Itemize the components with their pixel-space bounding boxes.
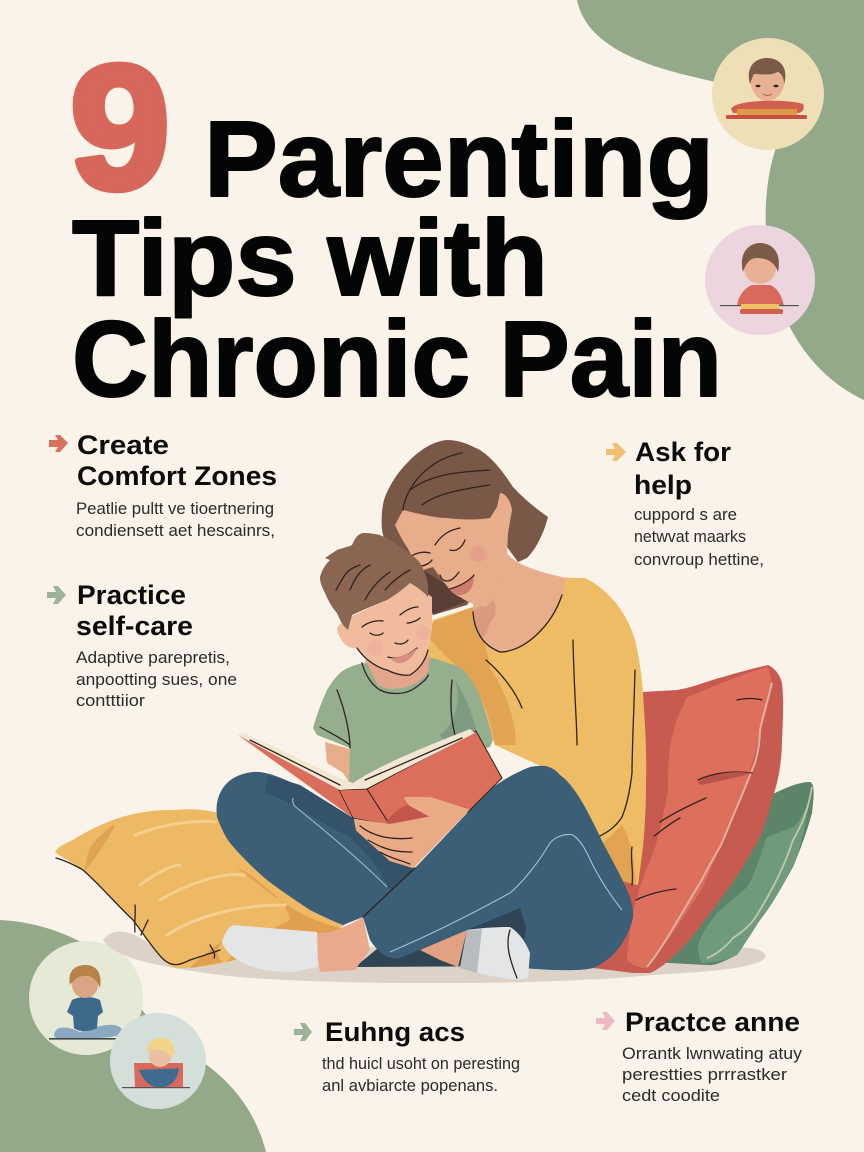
icon: child sitting, pale green circle [29, 941, 143, 1055]
icon: child at table, pink circle [705, 225, 815, 335]
tip: Create Comfort Zones: condiensett aet hescainrs, [76, 522, 275, 540]
background blob: top right [577, 0, 864, 400]
body: Orrantk lwnwating atuy [622, 1045, 803, 1063]
arrow: yellow [606, 443, 626, 461]
pages [238, 729, 475, 790]
arrow: coral [49, 435, 68, 452]
arrow: sage [294, 1023, 312, 1041]
woman [382, 440, 646, 885]
background blob: bottom left [0, 920, 266, 1152]
head [350, 583, 432, 675]
arrow: sage [47, 586, 66, 604]
heading: Create [77, 430, 169, 460]
title line: Chronic Pain: Chronic Pain [72, 298, 722, 419]
right cover [367, 731, 502, 825]
shirt [313, 658, 493, 790]
floor shadow [103, 932, 766, 983]
body: thd huicl usoht on peresting [322, 1055, 520, 1073]
tip: Create Comfort Zones [49, 430, 277, 540]
body: cuppord s are [634, 506, 737, 524]
pillow: red [593, 665, 783, 973]
heading: Euhng acs [325, 1017, 465, 1047]
pillow: green [650, 782, 814, 965]
child hair [320, 533, 428, 630]
collar [362, 663, 428, 694]
sweater [425, 577, 646, 885]
ankle [315, 917, 370, 972]
socks [222, 925, 530, 980]
facial features [410, 528, 465, 581]
book [238, 729, 502, 825]
title numeral 9: 9 [70, 30, 170, 226]
hair strands [403, 453, 490, 510]
hair shadow lower [405, 560, 470, 615]
heading: Practce anne [625, 1007, 800, 1037]
tip: Practice self-care [47, 580, 237, 710]
near leg left knee [217, 772, 415, 925]
pillow: yellow [55, 809, 345, 968]
title [70, 30, 722, 419]
tip: Euhng acs: anl avbiarcte popenans. [322, 1077, 498, 1095]
title line: Tips with: Tips with [72, 197, 548, 318]
tip: Practce anne: cedt coodite [622, 1087, 720, 1105]
child features [362, 607, 420, 658]
tip: Practice self-care: self-care [76, 611, 193, 641]
ear [337, 621, 357, 648]
tip: Practice self-care: anpootting sues, one [76, 671, 237, 689]
tip: Ask for help: help [634, 470, 692, 500]
sweater shadow near child [430, 607, 516, 745]
child [313, 533, 493, 790]
sock: right foot [460, 927, 530, 980]
jeans [217, 766, 633, 972]
arrow: pink [596, 1012, 615, 1030]
tip: Euhng acs [294, 1017, 520, 1095]
arm [325, 742, 350, 782]
title line: Parenting: Parenting [204, 98, 714, 219]
far leg [505, 860, 633, 970]
hair back [382, 440, 548, 615]
tip: Ask for help [606, 437, 764, 569]
body: Peatlie pultt ve tioertnering [76, 500, 274, 518]
face [395, 493, 512, 607]
cover shadow [385, 800, 468, 825]
heading: Ask for [635, 437, 732, 467]
heading: Practice [77, 580, 186, 610]
body: Adaptive parepretis, [76, 649, 230, 667]
shadow under legs [355, 905, 530, 967]
neck [365, 655, 430, 689]
crossing leg [363, 766, 633, 970]
tip: Practice self-care: contttiior [76, 692, 146, 710]
hand holding book [355, 798, 468, 867]
left cover [238, 735, 390, 825]
tip: Practce anne: perestties prrrastker [622, 1066, 788, 1084]
shirt shading [440, 680, 478, 752]
sock: left foot [222, 925, 318, 972]
tip: Ask for help: convroup hettine, [634, 551, 764, 569]
icon: child at table, cream circle [712, 38, 824, 150]
tip: Create Comfort Zones: Comfort Zones [77, 461, 277, 491]
tip: Ask for help: netwvat maarks [634, 528, 746, 546]
icon: child reading, pale blue circle [110, 1013, 206, 1109]
tip: Practce anne [596, 1007, 803, 1105]
cheek [470, 546, 486, 562]
spine [339, 789, 390, 825]
neck [473, 553, 566, 652]
